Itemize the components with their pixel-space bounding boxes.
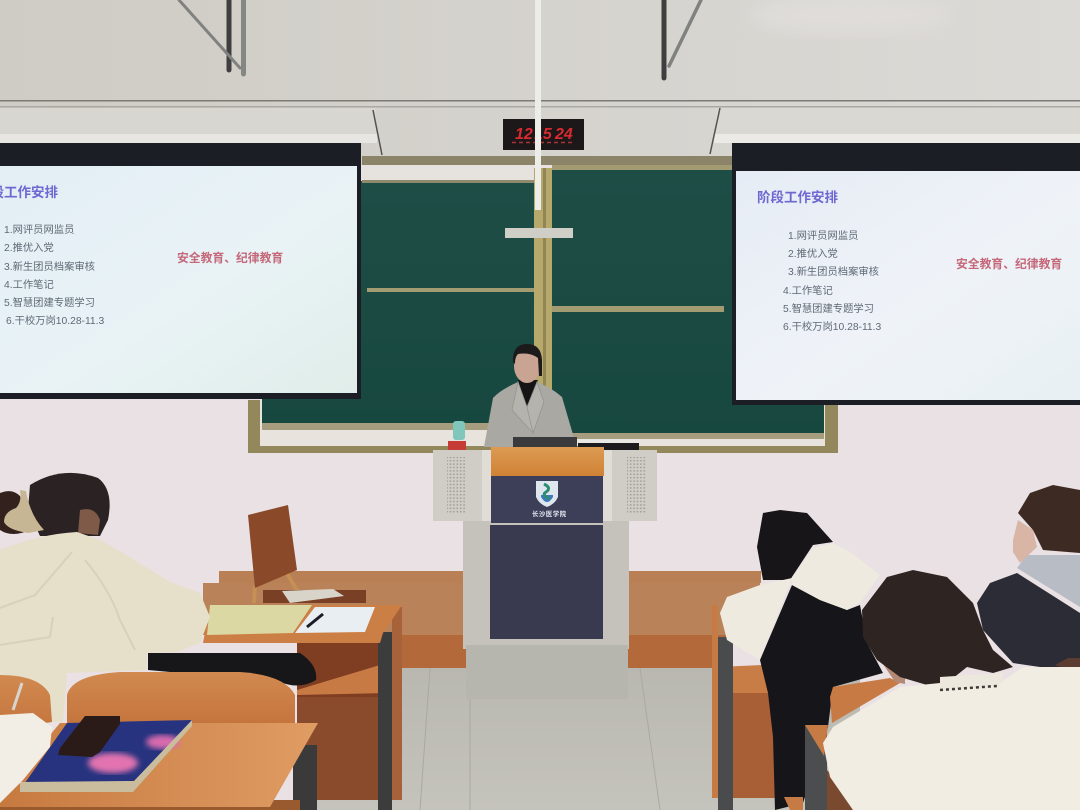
left desk with papers [203, 605, 402, 810]
projector pole [505, 0, 573, 238]
right slide list: 5.智慧团建专题学习 [783, 302, 874, 315]
hair scrunchie [4, 490, 44, 533]
laptop on podium [513, 437, 639, 450]
ear and neck [78, 509, 100, 535]
podium lower door [490, 525, 603, 639]
smartphone [58, 716, 120, 757]
digital wall clock: 15 [534, 126, 553, 143]
left slide red note: 安全教育、纪律教育 [177, 251, 283, 265]
right slide list: 4.工作笔记 [783, 284, 833, 297]
left slide list: 4.工作笔记 [4, 278, 54, 291]
podium orange top [491, 447, 604, 476]
left slide list: 1.网评员网监员 [4, 223, 74, 236]
black vest [760, 585, 883, 810]
right slide red note: 安全教育、纪律教育 [956, 257, 1062, 271]
hair [862, 570, 1013, 685]
right projection screen [732, 143, 1080, 405]
speaker face [514, 349, 540, 383]
cream coat [0, 532, 210, 722]
speaker [484, 344, 574, 447]
fleece body [823, 667, 1080, 810]
left projection screen [0, 143, 361, 399]
digital wall clock [503, 119, 584, 150]
white hood [792, 543, 880, 610]
ceiling brackets [179, 0, 701, 78]
hair bun [0, 491, 30, 534]
speaker lapels [512, 382, 544, 433]
blackboard [248, 156, 838, 453]
front right desk and chair [784, 678, 900, 810]
right slide list: 6.干校万岗10.28-11.3 [783, 320, 882, 333]
black bag under desk [148, 653, 316, 686]
left slide list [4, 223, 105, 327]
right slide list: 3.新生团员档案审核 [788, 265, 879, 278]
right slide list [783, 229, 882, 333]
sheet of paper on side table [282, 589, 344, 603]
notebook [207, 605, 312, 635]
water bottle [448, 421, 466, 450]
podium navy panel [491, 476, 603, 523]
white paper and pen [295, 607, 375, 633]
right light fixture [710, 108, 1080, 154]
right slide list: 2.推优入党 [788, 247, 838, 260]
podium [433, 447, 657, 699]
digital wall clock: 24 [554, 126, 573, 143]
speaker hair [513, 344, 542, 376]
left student in cream coat [0, 473, 210, 722]
hair [28, 473, 110, 536]
student sleeve [0, 713, 52, 803]
front left desk [0, 683, 318, 810]
right desks [712, 605, 775, 810]
left slide list: 5.智慧团建专题学习 [4, 296, 95, 309]
digital wall clock: 12 [515, 126, 533, 143]
brown bag strap [1055, 658, 1080, 674]
white sleeve [720, 578, 792, 660]
right slide list: 1.网评员网监员 [788, 229, 858, 242]
left slide list: 3.新生团员档案审核 [4, 260, 95, 273]
right student with black vest [720, 510, 883, 810]
speaker turtleneck [518, 380, 538, 408]
front right student in white fleece [823, 570, 1080, 810]
pen in hand [13, 683, 22, 710]
school logo [536, 481, 558, 507]
school name: 长沙医学院 [532, 509, 567, 518]
platform [203, 571, 860, 810]
striped collar [940, 673, 1003, 691]
teacher side table top [263, 589, 366, 603]
back wooden chair [248, 505, 298, 603]
front left chair back [67, 672, 295, 725]
neck [877, 655, 905, 684]
left slide list: 6.干校万岗10.28-11.3 [6, 314, 105, 327]
ponytail hair [757, 510, 833, 580]
far right student in dark jacket [977, 485, 1080, 667]
left light fixture [0, 108, 382, 155]
speaker grey coat [484, 382, 574, 447]
coat hood shadow and pocket [0, 552, 135, 650]
small chair front left [0, 675, 52, 730]
book with purple cover [20, 720, 192, 792]
right slide heading: 阶段工作安排 [757, 189, 838, 205]
left slide list: 2.推优入党 [4, 241, 54, 254]
